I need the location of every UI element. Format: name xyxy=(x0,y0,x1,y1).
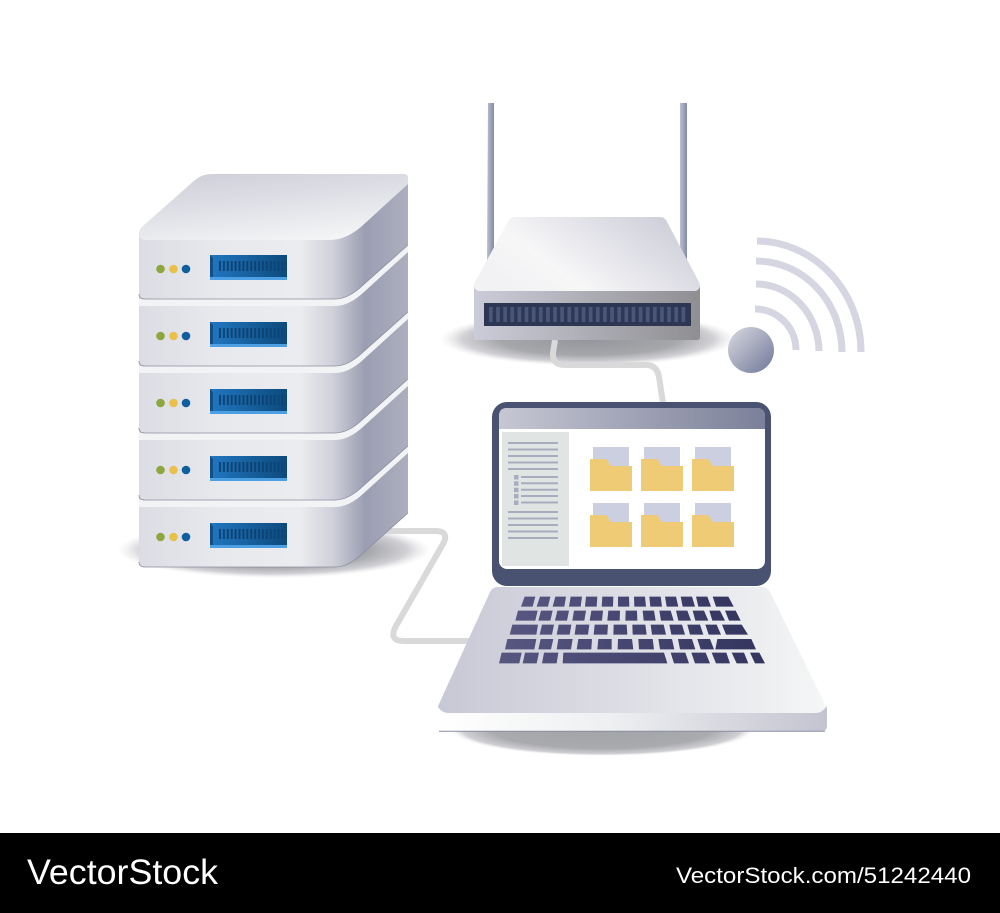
server top surface xyxy=(139,174,408,240)
server rack xyxy=(139,174,408,567)
folder 2 xyxy=(641,447,683,491)
screen sidebar xyxy=(502,432,569,566)
router body xyxy=(474,217,700,340)
router front panel xyxy=(474,286,700,340)
laptop screen display xyxy=(499,408,765,569)
router antenna left xyxy=(487,103,494,262)
cable: router to laptop xyxy=(553,340,663,403)
folder 3 xyxy=(692,447,734,491)
shadow: router xyxy=(440,312,736,366)
keyboard row 5 xyxy=(499,653,765,663)
server unit 2 xyxy=(139,250,408,366)
laptop screen bezel xyxy=(492,402,771,586)
keyboard row 4 xyxy=(505,639,756,649)
white lip: unit 5 xyxy=(139,446,408,507)
router antenna right xyxy=(680,103,687,262)
wifi ball xyxy=(728,327,774,373)
sidebar text lines xyxy=(508,443,558,538)
keyboard row 3 xyxy=(510,625,748,635)
keyboard xyxy=(499,597,765,663)
footer image id: VectorStock.com/51242440 xyxy=(676,863,971,888)
footer bar xyxy=(0,833,1000,913)
shadow: server xyxy=(117,522,431,578)
laptop base top xyxy=(437,587,827,713)
white lip: unit 4 xyxy=(139,379,408,440)
folder 1 xyxy=(590,447,632,491)
folder 5 xyxy=(641,503,683,547)
keyboard row 1 xyxy=(521,597,734,607)
server unit 3 xyxy=(139,317,408,433)
laptop xyxy=(437,402,827,731)
wifi signal arcs xyxy=(755,241,861,352)
keyboard row 2 xyxy=(515,611,741,621)
folder 4 xyxy=(590,503,632,547)
router display strip xyxy=(484,303,691,326)
footer brand: VectorStock xyxy=(27,853,219,892)
server unit 5 xyxy=(139,451,408,567)
server unit 1 xyxy=(139,183,408,299)
server unit 4 xyxy=(139,384,408,500)
laptop base front edge xyxy=(437,706,827,731)
sidebar bullets xyxy=(514,475,518,505)
white lip: unit 3 xyxy=(139,312,408,373)
shadow: laptop xyxy=(450,702,754,756)
cable: server to laptop xyxy=(385,531,472,641)
folder 6 xyxy=(692,503,734,547)
screen title bar xyxy=(499,408,765,429)
white lip: unit 2 xyxy=(139,245,408,306)
router top surface xyxy=(474,217,700,291)
